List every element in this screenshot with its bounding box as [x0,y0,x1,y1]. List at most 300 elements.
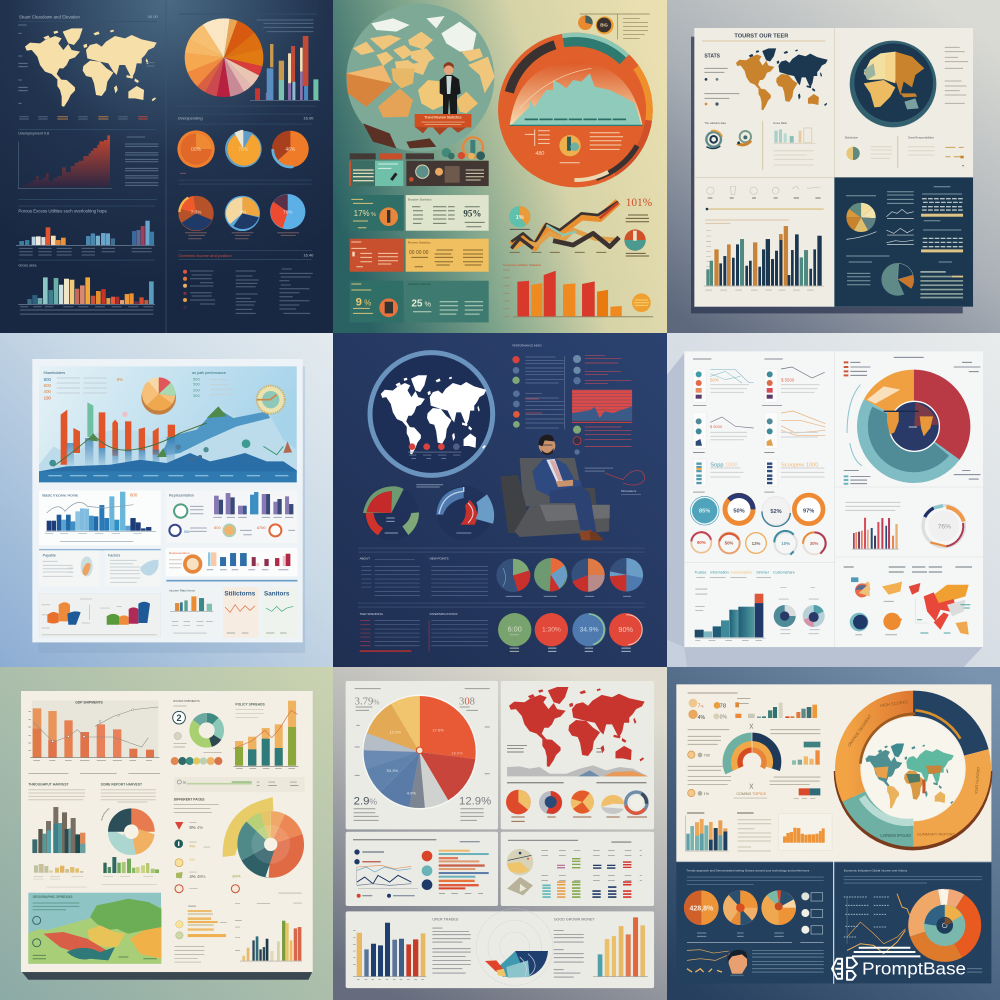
red section value: 16.40 [303,252,314,257]
map fragments [850,577,920,635]
man portrait with sparkline [687,950,747,975]
big radial chart [847,385,949,466]
small icon stats: COMING TOPICS [736,792,767,796]
small round icons under globe [442,137,485,160]
bottom text columns [190,269,313,313]
notes and legend right: Great Responsibilities [908,136,935,140]
bottom left labels [695,577,771,610]
people stats: 4% [698,715,705,721]
hero panel: 600 [44,383,51,388]
gold horizontal bars [174,906,227,962]
gradient timeline [706,208,824,210]
semicircle radar [476,909,553,985]
donut six: 78% [283,209,292,214]
card row four: 9 % [356,297,371,309]
card: big pie: 2.9% [354,795,377,807]
card: line and bars [346,832,498,906]
dark green heading: DIFFERENT PACES [174,798,205,802]
donut five: 3% [240,209,246,214]
thin bar chart [852,518,899,549]
pie chart: 53.3% [387,768,398,773]
radial legend [844,357,980,484]
bottom bars heading: Gross area [18,263,37,267]
blue bars panel [39,490,161,545]
area chart note lines [125,137,158,185]
blue gauge [572,613,606,651]
bottom right bars [235,893,302,961]
mini widgets right [792,742,820,799]
icon stat list: 8% 4% [189,825,203,830]
hero mountains [39,453,297,473]
panel: statistics: Stilictorns [224,591,256,598]
hero panel: 190 [44,395,51,400]
orange bars with line [28,707,160,774]
teal stepped bars [695,594,765,640]
grey chart backdrop [32,700,158,758]
pie one [496,559,530,592]
card row two [350,195,489,231]
data table [360,620,488,652]
blue bars panel: 800 [130,492,138,497]
report sheet [694,28,973,307]
small icon stats: 700 [704,754,710,758]
sub text [28,790,156,802]
dark panel table bars [920,199,963,298]
hero panel: 400 [44,389,51,394]
hero gear [257,386,285,414]
panel: factors [105,550,161,586]
tile background [333,0,667,334]
purple bars panel: Representation [169,493,194,497]
donut one [177,130,215,168]
bottom left heading row: Customshare [773,571,795,575]
pie note lines [257,20,313,32]
purple bars panel: 4700 [257,525,266,530]
top text row [688,693,750,704]
donut three: 46% [285,147,296,153]
card row three [350,239,489,272]
bottom left heading row [694,571,795,575]
chart title: GDP SHIPMENTS [75,701,104,705]
people stats: 78 [720,703,726,709]
slim stat strip: 30 [183,781,186,785]
map legend row [19,117,148,119]
card row one [349,153,489,186]
right panel heading: Economic Indicators Global Income over history [844,868,908,872]
people stats: 0% [720,715,727,721]
small ring charts [704,121,751,149]
red gauge two [609,613,642,651]
small round icons [801,892,823,934]
tile background [0,0,334,334]
hero panel: 300 [193,393,200,398]
icon stat list [174,822,241,893]
bullet legend [183,270,187,309]
dashboard sheet [32,359,303,642]
tile background [0,333,334,667]
donut row large: 52% [770,509,782,515]
title: TOURST OUR TEER [734,34,788,40]
mixed line charts [844,894,910,954]
card: bottom bars [346,911,654,988]
orange donut bars panel: Representation [169,551,190,555]
blue gauge: 34.9% [580,627,599,634]
top right note [580,14,650,39]
card row donuts [506,790,647,821]
report sheet [21,691,313,972]
navy left panel [676,863,833,983]
world globe [370,353,493,475]
gold horizontal bars: Income [188,906,197,908]
pie chart: 12.0% [390,730,401,735]
card row four [350,281,489,322]
bottom card text [432,928,584,977]
legend bullets [512,355,581,455]
sheet shadow [667,353,983,667]
tile: orange and navy ring report with logo [667,667,1000,1000]
red striped chart [572,390,632,422]
card: big pie: 12.9% [459,795,491,807]
pie left three [761,890,796,925]
pie captions [697,933,784,936]
tile: dark dashboard with world map [0,0,334,334]
fan chart [719,724,785,795]
overspending value: 16.00 [303,116,314,121]
coloured map [915,585,970,635]
banner [415,114,471,135]
panel: blob bars [39,594,161,637]
icon stat list: 1% [189,858,195,862]
hero bars [61,410,175,465]
panel: small bars: Income Ratio Items [169,589,195,593]
tile background [333,333,667,667]
fan chart text [688,730,820,784]
panel: small bars [166,587,218,638]
number badge: 2 [177,713,182,723]
donut pie [102,809,147,847]
note with outline heart [585,468,645,494]
area chart heading: Unemployment 0.8 [18,131,49,135]
pie three [571,558,605,592]
people stats: 7% [698,704,704,710]
card: big pie: 308 [459,696,475,707]
hero panel: an path performance [192,371,226,375]
pie captions [506,595,631,598]
person [440,62,461,114]
bottom left heading row: Simmer [756,571,770,575]
asia map panel [28,893,161,964]
notes and legend right [908,136,964,166]
icon stat list: 4% [189,844,196,849]
faint bar sketch [773,121,815,165]
man in armchair [500,435,610,540]
cream sheet [676,684,991,862]
green gauge: 6:00 [508,624,522,633]
red area bar chart [20,135,110,187]
pie two [534,558,567,591]
bottom left heading row: Consumption [730,571,752,575]
card: dial and columns [501,832,654,906]
dashboard shadow [38,366,305,653]
icon stat list: 4% 48% [189,874,206,879]
bottom left heading row: Information [710,571,729,575]
small icon stats: 1% [704,792,710,796]
donut two: 78% [238,147,249,153]
banner: Trend Review Statistics [424,116,462,120]
mini gauge top right [596,16,614,34]
skyline [511,73,641,125]
small chart texts: Sopp 1000 [710,462,738,468]
tile: sage and cream report [0,667,334,1000]
tile: grey cards with red map [333,667,667,1000]
grouped bars heading: Porous Excess Utilities such overlooking hope [18,208,107,213]
legend text [525,356,565,430]
card: big pie [346,681,498,829]
small line chart group [693,359,825,492]
multicolor bar chart [18,277,155,314]
big ring: LOREM IPSUM [880,833,911,838]
donut row large: 50% [733,508,745,514]
tile: teal and orange globe poster [333,0,678,334]
donut four: 7.3% [191,209,201,214]
green small bars [102,857,159,884]
small donut values: 90% [697,540,706,545]
right panel lines [844,876,982,883]
big ring: SUMMARY REPORT [917,831,956,836]
armchair [500,458,610,537]
note with outline heart: Motivations [621,489,637,493]
card row two: 95% [463,209,481,219]
icon labels [708,197,821,200]
tile: white report with big radial chart [667,333,1000,667]
donut row large: 97% [803,508,814,514]
tile: navy poster with seated man [333,333,667,667]
panel: population [39,550,99,586]
lower middle text [738,820,771,851]
donut row small [691,531,826,555]
panel: sanitors: Sanitors [264,591,290,598]
small donut values: 30% [810,541,819,546]
pie four [610,558,643,591]
hero panel [39,366,297,482]
gauge ring [923,505,964,547]
teal orange mini pie [509,206,530,229]
rule [39,548,161,551]
hero text: Shareholders [43,371,65,375]
pie left two [723,890,758,925]
purple bars panel: 800 [214,525,221,530]
donut four [178,196,214,231]
pie chart [362,695,477,809]
pie left one: 428,8% [689,905,714,912]
small orange blocks [735,702,755,718]
small chart texts [710,377,818,468]
faint bar sketch: Gross Ratio [773,121,788,125]
small chart texts: $ 5000 [710,424,723,429]
stats lines [704,68,739,106]
orange bar chart [503,270,653,317]
number badge [173,706,187,747]
gauge ring: 76% [938,524,951,531]
red gauge two: 90% [618,625,634,634]
small donut values: 10% [781,541,790,546]
card row two: Broader Statistics [408,197,432,201]
donut five [225,196,260,231]
line note [845,502,900,510]
donut six [270,194,305,229]
pie chart: 4.9% [407,791,416,796]
donut captions [180,173,299,239]
coin row [171,752,222,765]
hero panel: 500 [193,376,200,381]
overspending heading: Overspending [178,116,203,121]
dark panel pie [854,210,868,225]
percentage note [626,215,649,222]
world map [25,28,157,107]
dome [510,62,642,125]
tile background [667,0,1000,334]
big ring [840,698,986,844]
two tone world map [736,48,828,110]
bottom card second heading: GOOD GROWN MONEY [554,918,595,922]
red gauge one: 1:30% [542,626,561,633]
large orange ring chart: 480 [535,151,544,157]
left panel lines [687,877,824,884]
donut two [225,130,262,167]
big ring: ORANGE SEGMENT [846,713,873,748]
people stats [688,699,727,721]
zigzag axis labels [510,251,606,254]
tile: cream and navy report [667,0,1000,334]
mini gauge top right: BIG [600,23,609,28]
globe note lines [945,47,968,103]
small rings pair [774,587,825,634]
large orange pie [204,38,244,77]
report shadow [691,37,963,313]
stats label: STATS [704,53,721,59]
small donut values [697,540,819,546]
left panel heading: Trends approach and Demonstrated setting finance around your technology and preferences [686,869,810,873]
top middle heading: ROOMS SHIPMENTS [173,699,200,703]
tile background [0,667,334,1000]
zigzag ribbon chart [511,202,619,248]
donut three [272,131,309,167]
slim stat strip [174,777,305,792]
pie chart: 16.0% [451,750,463,755]
small icon stats [688,751,767,798]
card row four: Statistics Results [408,282,431,286]
card: red map [501,681,654,829]
small globe chart [845,136,892,160]
card row four: 25 % [411,299,432,310]
tile background [667,667,1000,1000]
small chart texts: Scoopew 1000 [781,462,818,468]
large orange ring chart [472,7,678,213]
stacked green bars with line [233,701,298,769]
text heading two: NEW POINTS [430,557,449,561]
asia map panel: GEOGRAPHIC SPREADS [33,895,73,899]
icon stat list: 84% [232,873,241,878]
wordmark side lines [967,969,982,972]
sub heading left: THROUGHPUT HARVEST [28,782,69,786]
dark quadrant [834,177,973,307]
dark panel second pie [881,263,914,296]
hero panel: 800 [44,377,51,382]
panel: sanitors [263,587,297,638]
card row three: Review Statistics [408,241,431,245]
heading note [174,804,219,812]
big ring: HIGH SCORES [880,699,909,708]
grouped bar chart [16,221,155,255]
panel: factors: Factors [108,553,120,557]
tile background [667,333,1000,667]
purple bars panel [166,490,297,543]
big ring: GROWTH DATA [974,767,980,795]
text heading one: ABOUT [360,557,370,561]
purple bars panel: 500 [184,530,190,534]
small globe chart: Distribution [845,136,859,140]
small ring charts: The statistics data [704,121,726,125]
lower left bar chart [685,813,754,851]
PromptBase wordmark: PromptBase [862,958,966,978]
tile background [333,667,667,1000]
dark panel sparklines [846,209,914,244]
orange donut bars panel [166,548,297,576]
table heading two: DIVERSIFICATIONS [430,612,457,616]
text block columns [361,560,488,595]
portrait text [752,950,824,972]
globe [346,4,495,152]
red gauge one [535,613,568,651]
dark panel headings and lines [846,187,962,285]
navy right panel [834,863,991,983]
ring center stats [559,135,581,156]
panel: statistics [223,587,259,638]
hero panel: 200 [193,387,200,392]
mini pie top right [578,15,593,30]
sub heading right: SOME REPORT HARVEST [101,782,142,786]
watermark striped lines [852,948,920,956]
map heading: Stuart Cleardown and Elevation [19,14,80,19]
small donut values: 50% [725,540,733,545]
navy bar chart [704,226,824,290]
orange bars heading: Consumer Inflation Statistics [503,263,542,267]
pie stat labels: 3.79% [355,696,379,707]
report sheet [684,351,983,647]
PromptBase logo icon [832,958,857,980]
small donut values: 12% [752,541,760,546]
man [532,435,604,540]
red section heading: Overview income and position [178,253,232,258]
table heading one: TIER SPENDING [360,612,384,616]
ring world map [865,744,954,809]
bottom card headings: UPER TRADES [432,918,459,922]
big percentage: 101% [626,197,653,209]
icons row [707,186,820,195]
donut row large [690,495,823,526]
segmented donut [194,718,219,743]
hero pie [141,380,176,415]
navy globe [850,41,936,127]
green red half pie [363,486,419,540]
teal orange mini pie: 1% [516,215,524,221]
small chart texts: 50% [710,378,719,383]
stacked bars beside pie [250,36,320,101]
stacked green bars with line: POLICY SPREADS [235,703,266,707]
sheet shadow [21,971,313,980]
map value: 00 00 [148,14,158,19]
small chart texts: $ 5500 [781,377,795,382]
